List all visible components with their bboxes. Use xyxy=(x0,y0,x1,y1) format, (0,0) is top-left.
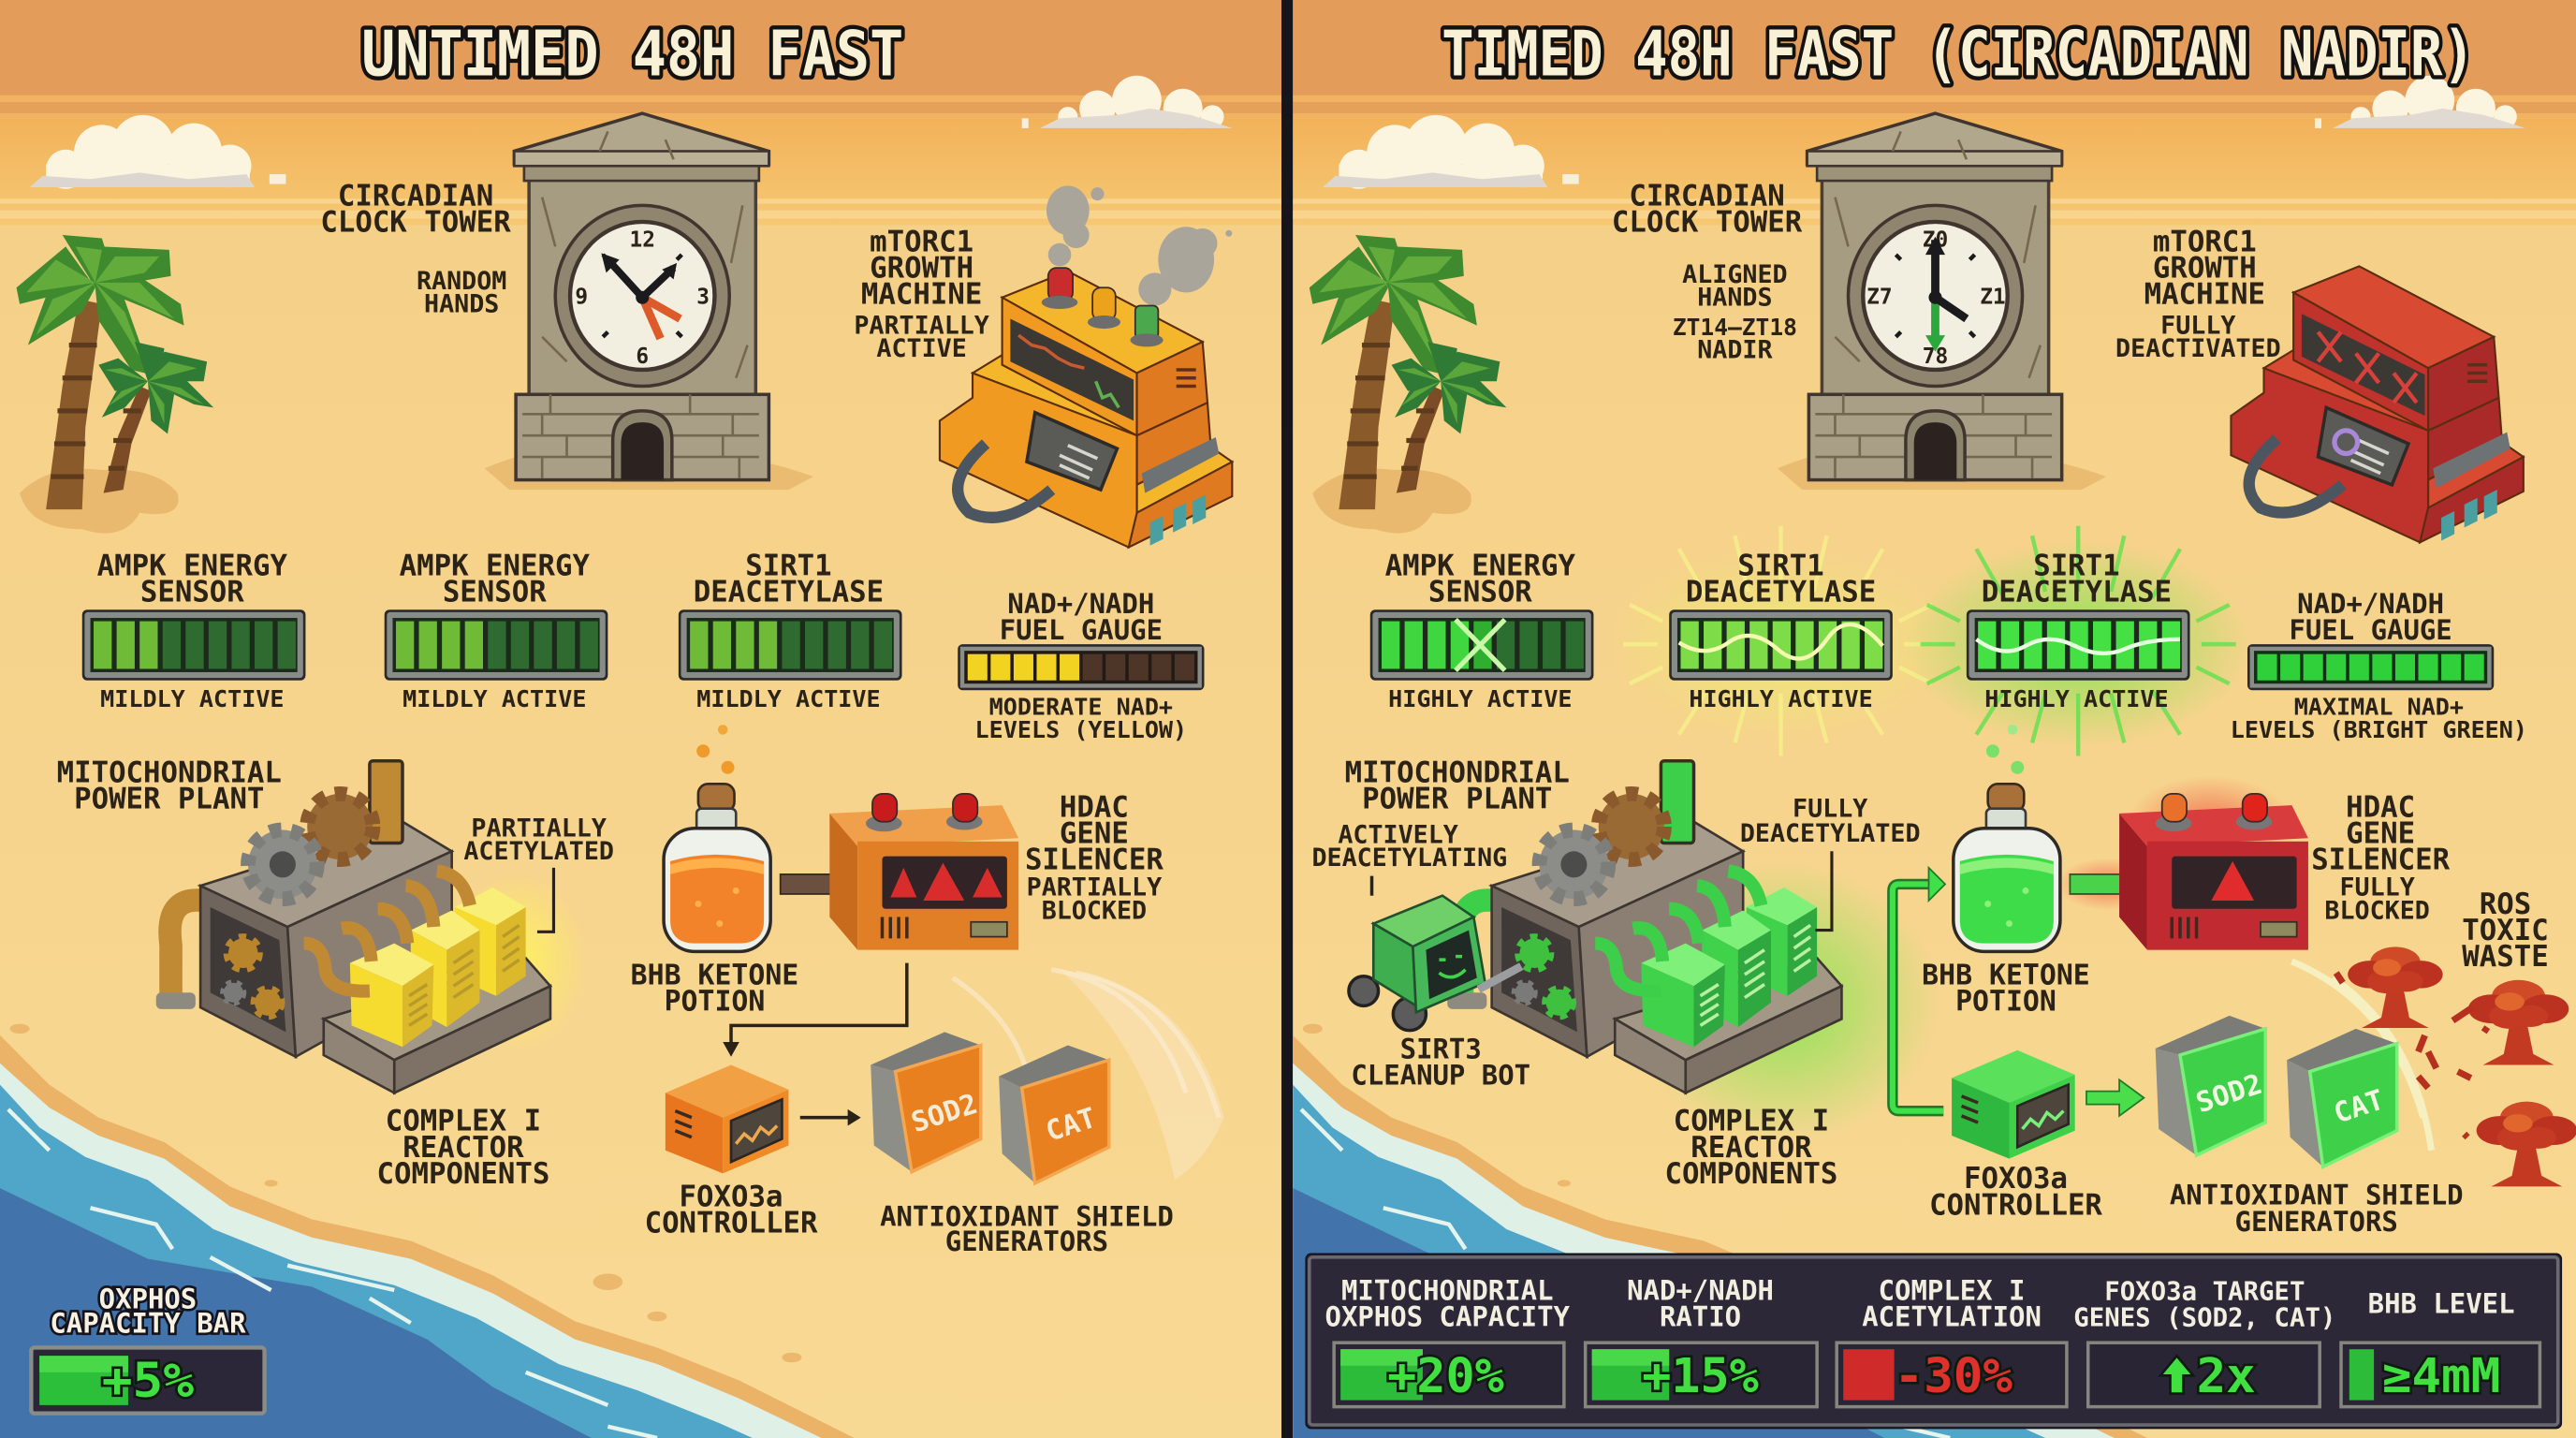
label: mTORC1 growth machine: ACTIVE xyxy=(876,334,967,363)
label: highly active 2: HIGHLY ACTIVE xyxy=(1689,685,1873,712)
metric: FOXO3a target genes xyxy=(2073,1278,2335,1407)
label: FOXO3a controller: FOXO3a xyxy=(1964,1162,2068,1196)
right clock tower: Z1 xyxy=(1980,286,2006,310)
mitochondrial power plant xyxy=(156,761,587,1093)
left palm trees xyxy=(17,235,213,534)
gauge: NAD moderate yellow xyxy=(958,644,1204,690)
mitochondrial power plant, green xyxy=(1447,761,1939,1142)
metric: FOXO3a target genes: GENES (SOD2, CAT) xyxy=(2073,1304,2335,1333)
label: HDAC gene silencer: FULLY xyxy=(2339,873,2415,902)
label: moderate NAD+ levels: MODERATE NAD+ xyxy=(989,694,1173,721)
antioxidant shield generators, green xyxy=(2156,961,2432,1167)
arrow: FOXO3a to shields, green xyxy=(2086,1079,2144,1116)
label: ROS toxic waste: ROS xyxy=(2480,888,2531,921)
label: HDAC gene silencer: HDAC xyxy=(2346,790,2415,824)
SIRT1 yellow sunburst xyxy=(1608,526,1954,756)
label: fully deacetylated: FULLY xyxy=(1793,794,1867,823)
gauge: SIRT1 mildly active xyxy=(679,609,902,681)
label: SIRT3 cleanup bot: CLEANUP BOT xyxy=(1351,1060,1530,1092)
label: random hands: RANDOM xyxy=(417,267,506,296)
right clock tower: Z0 xyxy=(1923,227,1948,252)
label: partially acetylated: PARTIALLY xyxy=(471,814,607,844)
gauge: AMPK 2 mildly active xyxy=(385,609,607,681)
label: SIRT1 deacetylase: DEACETYLASE xyxy=(1686,575,1876,609)
label: HDAC gene silencer: GENE xyxy=(2346,817,2415,851)
label: mTORC1 growth machine: mTORC1 xyxy=(870,226,973,259)
label: AMPK energy sensor 2: SENSOR xyxy=(443,575,547,609)
label: mitochondrial power plant: POWER PLANT xyxy=(1362,783,1552,816)
label: aligned hands ZT14-ZT18 nadir: NADIR xyxy=(1697,336,1773,365)
label: mildly active: MILDLY ACTIVE xyxy=(100,685,285,712)
metric: NAD+/NADH ratio xyxy=(1586,1275,1817,1407)
label: circadian clock tower: CLOCK TOWER xyxy=(320,206,511,240)
antioxidant shield generators: SOD2 xyxy=(907,1088,982,1139)
label: circadian clock tower: CLOCK TOWER xyxy=(1612,206,1803,240)
left clouds xyxy=(30,76,1232,189)
metric: BHB level: ≥4mM xyxy=(2382,1349,2500,1404)
label: mTORC1 growth machine: PARTIALLY xyxy=(854,311,989,340)
label: mitochondrial power plant: MITOCHONDRIAL xyxy=(57,756,282,790)
left clock tower: 9 xyxy=(575,286,588,310)
ROS toxic waste clouds xyxy=(2336,946,2576,1186)
label: aligned hands ZT14-ZT18 nadir: HANDS xyxy=(1697,284,1773,313)
OXPHOS capacity bar: +5% xyxy=(102,1354,194,1409)
mTORC1 machine fully deactivated xyxy=(2231,266,2524,542)
left clock tower xyxy=(485,113,813,490)
label: SIRT1 deacetylase: SIRT1 xyxy=(745,549,832,582)
metric: mitochondrial oxphos capacity xyxy=(1325,1275,1571,1407)
label: HDAC gene silencer: GENE xyxy=(1060,817,1129,851)
label: mTORC1 growth machine: MACHINE xyxy=(861,278,982,312)
label: actively deacetylating: ACTIVELY xyxy=(1338,821,1458,850)
label: mildly active 2: MILDLY ACTIVE xyxy=(402,685,586,712)
left clock tower: 3 xyxy=(696,286,710,310)
left clock tower: 12 xyxy=(630,227,655,252)
connector: potion blocks HDAC xyxy=(2056,858,2159,911)
right clock tower: Z7 xyxy=(1866,286,1893,310)
metric: complex I acetylation: -30% xyxy=(1895,1349,2012,1404)
antioxidant shield generators, green: CAT xyxy=(2330,1084,2388,1130)
label: mTORC1 growth machine: MACHINE xyxy=(2144,278,2265,312)
label: circadian clock tower: CIRCADIAN xyxy=(338,179,493,213)
gauge: AMPK highly active xyxy=(1370,609,1593,681)
OXPHOS capacity bar: CAPACITY BAR xyxy=(50,1308,246,1340)
FOXO3a controller cube xyxy=(666,1065,788,1173)
label: complex I reactor components: COMPLEX I xyxy=(1674,1105,1829,1138)
right clouds xyxy=(1323,76,2525,189)
label: BHB ketone potion: BHB KETONE xyxy=(1922,959,2090,992)
label: mildly active 3: MILDLY ACTIVE xyxy=(696,685,881,712)
label: actively deacetylating: DEACETYLATING xyxy=(1312,844,1507,873)
right panel: timed 48h fast circadian nadir xyxy=(1293,0,2576,1438)
gauge: SIRT1 highly active bright green xyxy=(1967,609,2190,681)
connector: potion to HDAC xyxy=(781,874,856,894)
label: aligned hands ZT14-ZT18 nadir: ALIGNED xyxy=(1682,260,1788,289)
arrow: FOXO3a back to potion xyxy=(1893,868,1945,1111)
label: HDAC gene silencer: SILENCER xyxy=(1025,844,1164,877)
OXPHOS capacity bar: OXPHOS xyxy=(99,1283,197,1314)
BHB ketone potion, green xyxy=(1954,725,2060,951)
label: aligned hands ZT14-ZT18 nadir: ZT14–ZT18 xyxy=(1673,314,1797,341)
label: HDAC gene silencer: HDAC xyxy=(1060,790,1129,824)
metric: FOXO3a target genes: FOXO3a TARGET xyxy=(2104,1278,2305,1307)
label: NAD+/NADH fuel gauge: NAD+/NADH xyxy=(1007,588,1154,620)
FOXO3a controller cube, green xyxy=(1952,1050,2075,1159)
label: highly active: HIGHLY ACTIVE xyxy=(1388,685,1573,712)
metric: complex I acetylation: ACETYLATION xyxy=(1862,1301,2042,1333)
right palm trees xyxy=(1310,235,1506,534)
left clock tower: 6 xyxy=(636,345,649,369)
label: moderate NAD+ levels: LEVELS (YELLOW) xyxy=(975,716,1187,743)
label: mitochondrial power plant: MITOCHONDRIAL xyxy=(1345,756,1570,790)
label: HDAC gene silencer: BLOCKED xyxy=(1042,896,1147,925)
mTORC1 machine partially active xyxy=(940,185,1232,548)
label: FOXO3a controller: CONTROLLER xyxy=(1929,1188,2102,1222)
label: antioxidant shield generators: ANTIOXIDANT SHIELD xyxy=(2170,1180,2464,1211)
label: complex I reactor components: REACTOR xyxy=(402,1131,524,1165)
label: fully deacetylated: DEACETYLATED xyxy=(1740,819,1921,848)
gauge: NAD maximal green xyxy=(2247,644,2494,690)
antioxidant shield generators, green: SOD2 xyxy=(2192,1068,2266,1120)
metric: BHB level: BHB LEVEL xyxy=(2368,1288,2515,1320)
label: mTORC1 growth machine: GROWTH xyxy=(2153,252,2257,286)
metric: NAD+/NADH ratio: NAD+/NADH xyxy=(1627,1275,1774,1307)
label: ROS toxic waste: TOXIC xyxy=(2462,914,2549,947)
label: BHB ketone potion: POTION xyxy=(1955,986,2056,1019)
label: HDAC gene silencer: BLOCKED xyxy=(2324,896,2430,925)
HDAC gene silencer box xyxy=(829,794,1018,950)
metric: NAD+/NADH ratio: RATIO xyxy=(1660,1301,1741,1333)
label: AMPK energy sensor: SENSOR xyxy=(140,575,244,609)
metric: NAD+/NADH ratio: +15% xyxy=(1642,1349,1759,1404)
metric: BHB level xyxy=(2341,1288,2539,1407)
label: SIRT3 cleanup bot: SIRT3 xyxy=(1400,1033,1482,1064)
label: mTORC1 growth machine: GROWTH xyxy=(870,252,973,286)
panel divider xyxy=(1281,0,1293,1438)
results dashboard xyxy=(1306,1254,2561,1428)
short marker: deacetylating xyxy=(1371,876,1373,896)
label: HDAC gene silencer: SILENCER xyxy=(2311,844,2451,877)
label: FOXO3a controller: FOXO3a xyxy=(680,1180,783,1213)
antioxidant shield generators: CAT xyxy=(1042,1102,1100,1149)
arrow: HDAC to FOXO3a xyxy=(723,963,907,1057)
label: AMPK energy sensor: AMPK ENERGY xyxy=(97,549,288,582)
metric: mitochondrial oxphos capacity: MITOCHONDRIAL xyxy=(1341,1275,1554,1307)
left panel background xyxy=(0,0,1283,1438)
OXPHOS capacity bar xyxy=(31,1283,265,1414)
label: mTORC1 growth machine: mTORC1 xyxy=(2153,226,2257,259)
label: SIRT1 deacetylase: DEACETYLASE xyxy=(694,575,884,609)
label: HDAC gene silencer: PARTIALLY xyxy=(1027,873,1162,902)
gauge: AMPK mildly active xyxy=(82,609,305,681)
label: antioxidant shield generators: ANTIOXIDANT SHIELD xyxy=(880,1201,1174,1233)
label: FOXO3a controller: CONTROLLER xyxy=(645,1207,818,1240)
right clock tower xyxy=(1778,113,2106,490)
label: AMPK energy sensor: AMPK ENERGY xyxy=(1385,549,1576,582)
label: SIRT1 deacetylase 2: SIRT1 xyxy=(2033,549,2120,582)
metric: mitochondrial oxphos capacity: +20% xyxy=(1387,1349,1504,1404)
label: complex I reactor components: COMPLEX I xyxy=(386,1105,541,1138)
label: AMPK energy sensor 2: AMPK ENERGY xyxy=(400,549,590,582)
label: complex I reactor components: REACTOR xyxy=(1690,1131,1812,1165)
label: SIRT1 deacetylase 2: DEACETYLASE xyxy=(1982,575,2172,609)
metric: FOXO3a target genes: 2x xyxy=(2197,1349,2256,1404)
HDAC gene silencer box, red xyxy=(2119,776,2308,950)
left title: UNTIMED 48H FAST xyxy=(361,18,903,91)
label: NAD+/NADH fuel gauge: FUEL GAUGE xyxy=(1000,614,1163,646)
label: mitochondrial power plant: POWER PLANT xyxy=(74,783,264,816)
label: BHB ketone potion: BHB KETONE xyxy=(631,959,798,992)
label: maximal NAD+ levels: LEVELS (BRIGHT GREEN) xyxy=(2231,716,2527,743)
label: antioxidant shield generators: GENERATORS xyxy=(2235,1206,2398,1238)
label: random hands: HANDS xyxy=(424,290,499,319)
right panel background xyxy=(1293,0,2576,1438)
metric: complex I acetylation xyxy=(1837,1275,2067,1407)
metric: complex I acetylation: COMPLEX I xyxy=(1879,1275,2025,1307)
label: circadian clock tower: CIRCADIAN xyxy=(1629,179,1785,213)
label: SIRT1 deacetylase: SIRT1 xyxy=(1737,549,1824,582)
right clock tower: 78 xyxy=(1923,345,1948,369)
label: complex I reactor components: COMPONENTS xyxy=(1665,1157,1837,1191)
right ocean and shoreline xyxy=(1293,1024,2147,1438)
callout line: acetylated xyxy=(537,868,553,932)
SIRT1 green sunburst xyxy=(1906,526,2250,756)
label: antioxidant shield generators: GENERATORS xyxy=(945,1225,1108,1257)
label: complex I reactor components: COMPONENTS xyxy=(377,1157,549,1191)
label: BHB ketone potion: POTION xyxy=(665,986,765,1019)
label: AMPK energy sensor: SENSOR xyxy=(1428,575,1532,609)
label: ROS toxic waste: WASTE xyxy=(2462,940,2549,974)
SIRT3 cleanup bot xyxy=(1349,896,1521,1031)
label: maximal NAD+ levels: MAXIMAL NAD+ xyxy=(2294,694,2464,721)
label: highly active 3: HIGHLY ACTIVE xyxy=(1984,685,2169,712)
gauge: SIRT1 highly active yellow-green xyxy=(1669,609,1893,681)
label: mTORC1 growth machine: FULLY xyxy=(2160,311,2235,340)
left panel: untimed 48h fast xyxy=(0,0,1283,1438)
callout line: deacetylated xyxy=(1815,851,1832,931)
arrow: FOXO3a to shields xyxy=(800,1109,861,1125)
BHB ketone potion xyxy=(664,725,770,951)
antioxidant shield generators xyxy=(871,970,1224,1183)
label: NAD+/NADH fuel gauge: FUEL GAUGE xyxy=(2289,614,2452,646)
label: partially acetylated: ACETYLATED xyxy=(463,837,614,866)
label: mTORC1 growth machine: DEACTIVATED xyxy=(2115,334,2281,363)
label: NAD+/NADH fuel gauge: NAD+/NADH xyxy=(2297,588,2444,620)
left ocean and shoreline xyxy=(0,1024,855,1438)
metric: mitochondrial oxphos capacity: OXPHOS CAPACITY xyxy=(1325,1301,1571,1333)
